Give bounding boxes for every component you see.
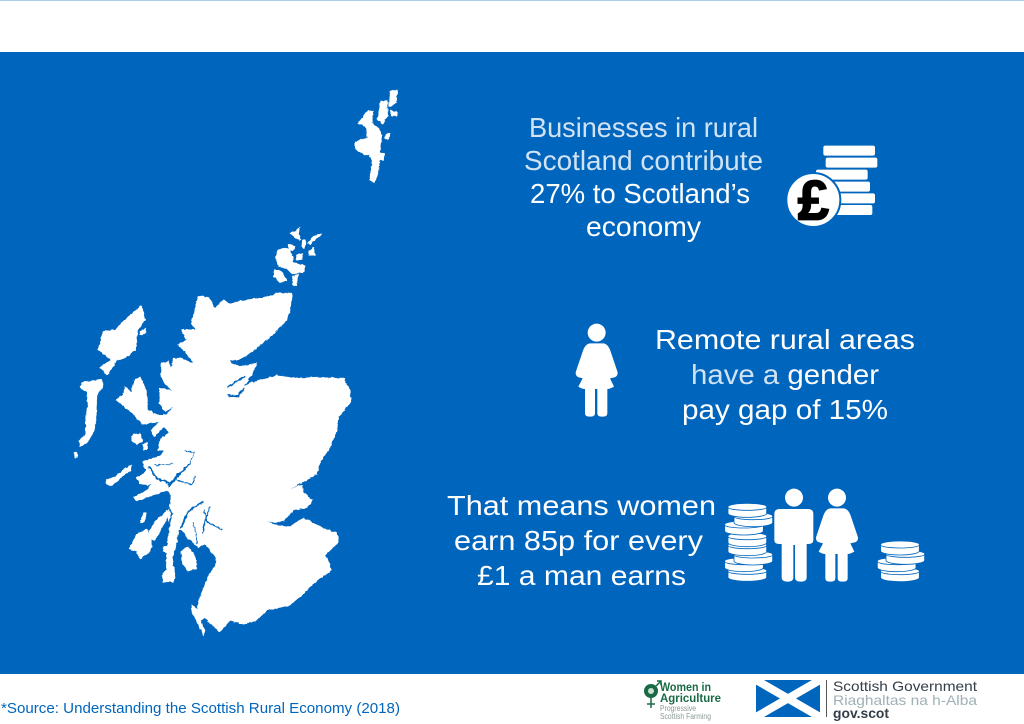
text: women earn 85p: £1 a man earns [477,560,686,591]
icon: short coin stack [877,541,925,582]
logo: Scottish Government wordmark: Riaghaltas na h-Alba [833,692,977,708]
text: businesses: 27% to Scotland’s [530,178,750,209]
text: gender pay gap: pay gap of 15% [682,394,888,425]
text: businesses: economy [586,211,701,242]
icon: pound coin stack: £ [798,168,829,231]
text: gender pay gap: have a gender [691,359,879,390]
icon: tall coin stack [725,503,773,581]
logo: Women in Agriculture: Progressive [660,704,696,713]
map: Orkney [274,227,322,285]
logo: Women in Agriculture [644,680,721,721]
text: businesses: Businesses in rural [529,112,758,143]
icon: woman [576,324,618,417]
logo: Scottish Government wordmark: Scottish Government [833,678,977,694]
text: gender pay gap: Remote rural areas [655,324,915,355]
logo: Women in Agriculture: Agriculture [660,691,721,705]
map: mainland and western isles [75,293,351,635]
icon: coins, man, woman and smaller coins [725,489,925,582]
text: women earn 85p: That means women [447,490,716,521]
sea lochs [149,377,245,543]
text: businesses [524,112,763,242]
icon: pound coin stack [786,146,877,231]
logo: Women in Agriculture: Women in [660,680,711,694]
text: women earn 85p: earn 85p for every [454,525,703,556]
text: gender pay gap [655,324,915,425]
source note: *Source: Understanding the Scottish Rural Economy (2018) [1,700,400,717]
map: Shetland [355,91,397,183]
icon: gender emblem [644,681,661,708]
logo: Saltire flag [756,680,820,717]
map of Scotland [75,91,397,635]
icon: woman [816,489,858,582]
icon: man [774,489,813,582]
logo: Scottish Government wordmark [826,678,977,721]
logo: Women in Agriculture: Scottish Farming [660,712,711,721]
text: women earn 85p [447,490,716,591]
text: businesses: Scotland contribute [524,145,763,176]
logo: Scottish Government wordmark: gov.scot [833,705,889,721]
